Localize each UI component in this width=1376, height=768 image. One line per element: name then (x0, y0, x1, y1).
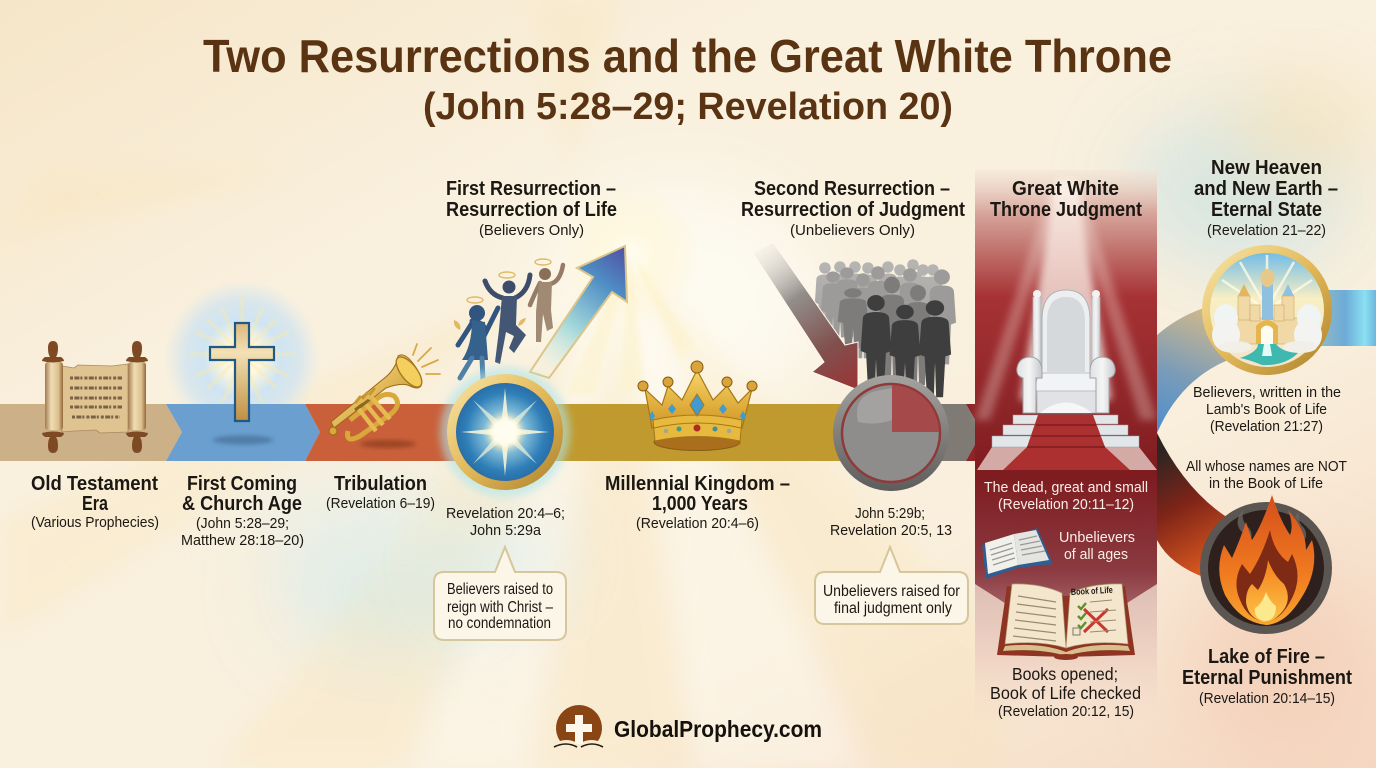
labels: tribulation (326, 473, 435, 512)
stage: tribulation (329, 344, 440, 448)
labels: old testament era: Old Testament (31, 473, 158, 495)
icon: rising arrow (530, 246, 627, 378)
labels: old testament era: Era (82, 493, 109, 515)
book of life label: Book of Life (1071, 585, 1113, 597)
callout: believers raised: reign with Christ – (447, 599, 553, 616)
panel background lower (975, 560, 1157, 732)
callout: unbelievers raised: Unbelievers raised for (823, 583, 960, 600)
icon: cross in dome with book (554, 705, 603, 747)
labels: first coming and church age: Matthew 28:18–20) (181, 532, 304, 549)
text: books opened (990, 664, 1141, 720)
labels: second resurrection: Second Resurrection – (754, 178, 950, 200)
text: names not in book of life: All whose names are NOT (1186, 458, 1347, 475)
panel: new heaven and new earth (1193, 157, 1341, 435)
heading: new heaven and new earth: (Revelation 21–22) (1207, 222, 1326, 239)
path: blue curve to new heaven (1157, 306, 1228, 433)
labels: first resurrection: Resurrection of Life (446, 199, 617, 221)
heading: lake of fire: Eternal Punishment (1182, 667, 1352, 689)
back row (815, 259, 943, 336)
callout: unbelievers raised: final judgment only (834, 600, 952, 617)
labels: first resurrection: (Believers Only) (479, 222, 584, 239)
icon: scroll (42, 341, 148, 453)
callout: believers raised: no condemnation (448, 615, 551, 632)
icon: cross (210, 323, 274, 421)
near row (838, 277, 932, 385)
labels: old testament era (31, 473, 159, 531)
callout: believers raised: Believers raised to (447, 581, 553, 598)
path: blue band leaving eternal state (1320, 290, 1376, 346)
heading: lake of fire (1182, 646, 1352, 707)
shadow under cross (213, 436, 273, 444)
text: unbelievers of all ages: Unbelievers (1059, 529, 1135, 546)
carpet (1003, 415, 1130, 470)
labels: first resurrection scripture: Revelation 20:4–6; (446, 505, 565, 522)
sound lines (413, 344, 440, 374)
light burst behind rising arrow (560, 185, 700, 395)
icon: book of life (997, 584, 1135, 660)
throne (977, 290, 1157, 470)
labels: first resurrection (446, 178, 617, 239)
woman figure (458, 297, 498, 380)
heading: new heaven and new earth (1194, 157, 1338, 239)
heading: great white throne judgment: Throne Judgment (990, 199, 1142, 221)
heading: lake of fire: (Revelation 20:14–15) (1199, 690, 1335, 707)
man figure (485, 272, 530, 364)
icon: fire circle (1200, 495, 1332, 634)
text: names not in book of life: in the Book of Life (1209, 475, 1323, 492)
labels: millennial kingdom: Millennial Kingdom – (605, 473, 790, 495)
text: unbelievers of all ages: of all ages (1064, 546, 1128, 563)
text: the dead, great and small: The dead, great and small (984, 479, 1148, 496)
third figure (530, 259, 563, 342)
labels: millennial kingdom: (Revelation 20:4–6) (636, 515, 759, 532)
light rays around cross (190, 295, 295, 420)
labels: millennial kingdom: 1,000 Years (652, 493, 748, 515)
icon: small open book (982, 528, 1053, 579)
labels: tribulation: Tribulation (334, 473, 427, 495)
icon: rising believers (454, 259, 563, 380)
icon: first resurrection orb (440, 367, 570, 497)
text: names not in book of life (1186, 458, 1347, 492)
labels: first coming and church age: First Coming (187, 473, 297, 495)
labels: second resurrection: (Unbelievers Only) (790, 222, 915, 239)
text: books opened: (Revelation 20:12, 15) (998, 703, 1134, 720)
logo: globalprophecy.com (554, 705, 822, 747)
icon: trumpet (329, 344, 440, 439)
labels: first coming and church age: (John 5:28–29; (196, 515, 289, 532)
throne back (1042, 290, 1090, 375)
icon: heavenly city (1202, 245, 1332, 375)
heading: lake of fire: Lake of Fire – (1208, 646, 1325, 668)
heading: great white throne judgment (990, 178, 1142, 221)
text: unbelievers of all ages (1059, 529, 1135, 563)
title (203, 30, 1172, 128)
glow behind cross (164, 280, 320, 436)
heading: great white throne judgment: Great White (1012, 178, 1119, 200)
heading: new heaven and new earth: Eternal State (1211, 199, 1322, 221)
labels: first resurrection scripture: John 5:29a (470, 522, 542, 539)
website name: GlobalProphecy.com (614, 716, 822, 742)
icon: crowd of unbelievers, back rows (815, 259, 956, 385)
icon: descending arrow (753, 242, 858, 390)
panel: great white throne judgment (975, 170, 1157, 732)
title: Two Resurrections and the Great White Throne (203, 30, 1172, 82)
callout: unbelievers raised (815, 547, 968, 624)
throne floor (977, 447, 1157, 470)
text: books opened: Books opened; (1012, 664, 1118, 684)
labels: tribulation: (Revelation 6–19) (326, 495, 435, 512)
labels: second resurrection: Resurrection of Judgment (741, 199, 965, 221)
labels: first resurrection scripture (446, 505, 565, 539)
text: believers written in the lamb's book of life: Believers, written in the (1193, 384, 1341, 401)
text: the dead, great and small: (Revelation 20:11–12) (998, 496, 1134, 513)
throne posts (1033, 297, 1041, 372)
heading: new heaven and new earth: New Heaven (1211, 157, 1322, 179)
steps (1013, 415, 1118, 424)
labels: second resurrection scripture: Revelation 20:5, 13 (830, 522, 952, 539)
icon: second resurrection orb (833, 375, 949, 491)
armrests (1017, 357, 1042, 413)
labels: second resurrection scripture: John 5:29b; (855, 505, 925, 522)
icon: bowed foreground figures (861, 295, 951, 397)
panel background upper chevron (975, 170, 1157, 642)
middle row (821, 266, 956, 364)
labels: second resurrection scripture (830, 505, 952, 539)
text: believers written in the lamb's book of life (1193, 384, 1341, 435)
labels: millennial kingdom (605, 473, 790, 532)
timeline band (0, 404, 982, 461)
heading: new heaven and new earth: and New Earth – (1194, 178, 1338, 200)
throne seat and base (1037, 387, 1096, 413)
callout: believers raised (434, 547, 566, 640)
title: (John 5:28–29; Revelation 20) (423, 86, 953, 128)
text: the dead, great and small (984, 479, 1148, 513)
text: believers written in the lamb's book of life: (Revelation 21:27) (1210, 418, 1323, 435)
panel: lake of fire (1182, 458, 1352, 707)
light rays over the throne (975, 180, 1157, 420)
text: books opened: Book of Life checked (990, 683, 1141, 703)
labels: old testament era: (Various Prophecies) (31, 514, 159, 531)
labels: first resurrection: First Resurrection – (446, 178, 616, 200)
labels: first coming and church age (181, 473, 304, 549)
labels: first coming and church age: & Church Age (182, 493, 302, 515)
text: believers written in the lamb's book of life: Lamb's Book of Life (1206, 401, 1327, 418)
labels: second resurrection (741, 178, 965, 239)
path: fire curve to lake of fire (1157, 433, 1228, 578)
shadow under trumpet (360, 440, 416, 448)
icon: crown (638, 361, 757, 450)
